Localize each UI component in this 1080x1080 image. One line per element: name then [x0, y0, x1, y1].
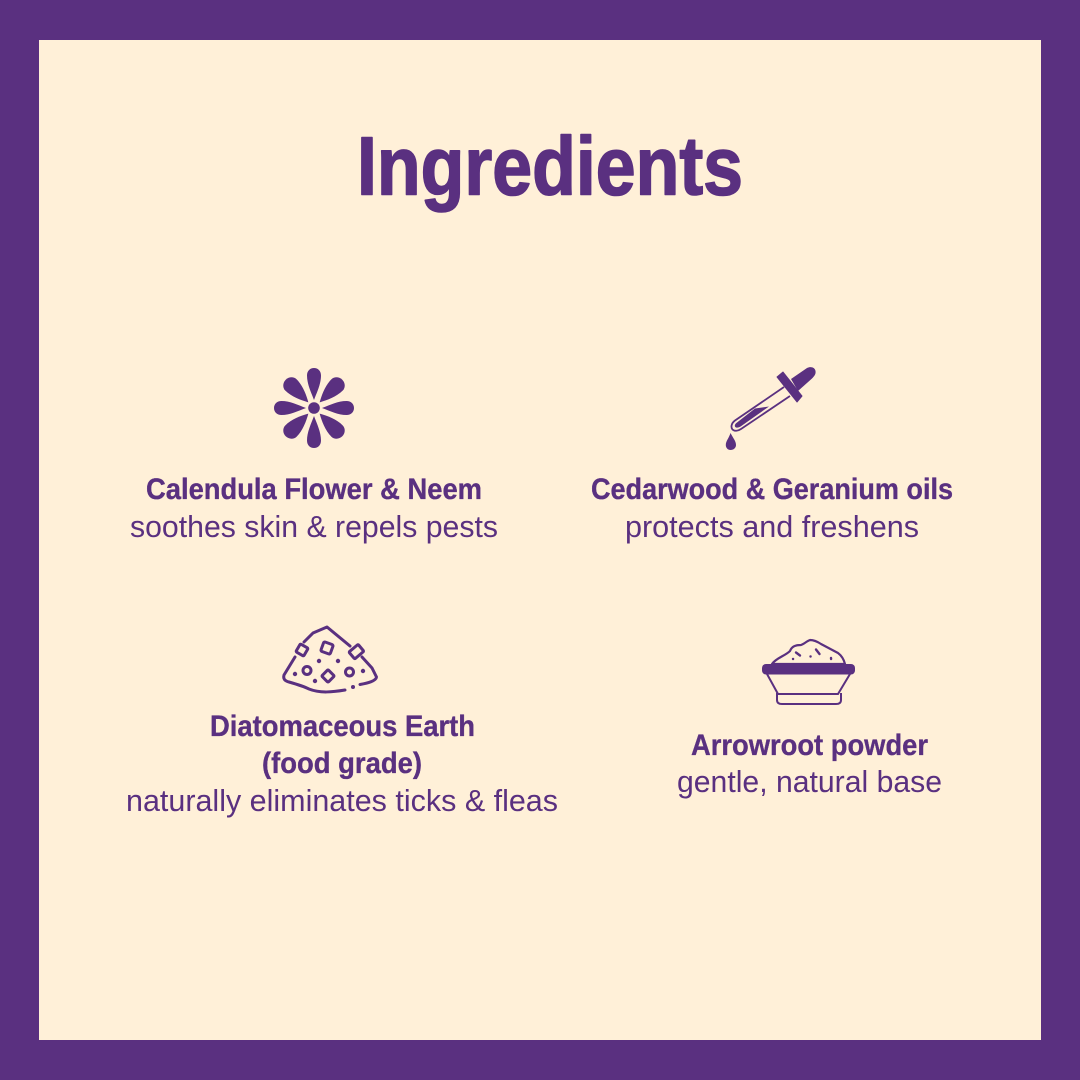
- powder mound: [772, 640, 845, 664]
- bowl base: [777, 693, 841, 704]
- ingredient name: Cedarwood & Geranium oils: [591, 473, 953, 506]
- dropper collar: [777, 372, 802, 402]
- ingredient benefit: gentle, natural base: [677, 764, 942, 799]
- ingredient: cedarwood and geranium oils: [591, 367, 953, 544]
- drop: [726, 433, 736, 450]
- title: Ingredients: [357, 120, 743, 212]
- ingredient name: Calendula Flower & Neem: [146, 473, 482, 506]
- ingredient: diatomaceous earth: [126, 627, 558, 818]
- ingredient name line 1: Diatomaceous Earth: [210, 710, 475, 743]
- powder specks: [793, 650, 831, 659]
- dropper glass tube: [731, 387, 790, 431]
- ingredient: arrowroot powder: [677, 640, 942, 799]
- ingredient name line 2: (food grade): [262, 747, 422, 780]
- earth specks: [293, 659, 365, 689]
- icon: earth mound: [284, 627, 376, 692]
- ingredient name: Arrowroot powder: [691, 729, 928, 762]
- dropper bulb: [791, 367, 816, 391]
- ingredient benefit: soothes skin & repels pests: [130, 509, 498, 544]
- bowl rim: [762, 664, 855, 674]
- icon: powder bowl: [762, 640, 855, 704]
- dropper liquid: [735, 406, 769, 428]
- icon: flower: [274, 368, 354, 448]
- ingredient benefit: protects and freshens: [625, 509, 919, 544]
- ingredient benefit: naturally eliminates ticks & fleas: [126, 783, 558, 818]
- icon: dropper: [726, 367, 816, 450]
- bowl body: [767, 674, 850, 694]
- ingredient: calendula flower and neem: [130, 368, 498, 544]
